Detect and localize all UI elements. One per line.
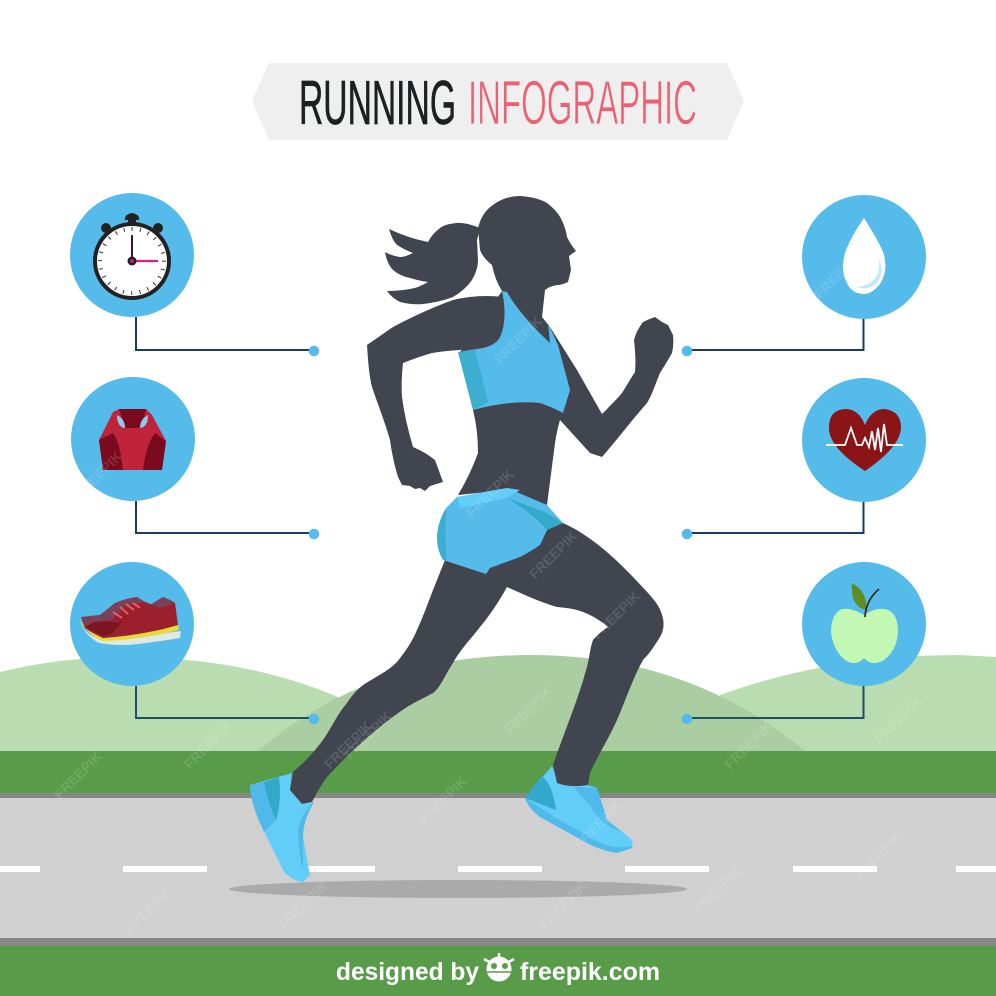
connector: apple xyxy=(688,686,864,718)
watermarks: FREEPIK xyxy=(121,883,175,937)
shoe: front foot xyxy=(525,766,633,853)
title text: running: RUNNING xyxy=(299,69,456,138)
watermarks: FREEPIK xyxy=(851,828,905,882)
watermarks: FREEPIK xyxy=(589,588,643,642)
ponytail xyxy=(385,223,480,304)
background: grass band xyxy=(0,751,996,793)
background: hills xyxy=(0,655,996,751)
watermarks: FREEPIK xyxy=(691,863,745,917)
runner silhouette xyxy=(250,196,673,882)
credit text: freepik.com: freepik.com xyxy=(520,958,660,986)
watermarks: FREEPIK xyxy=(491,313,545,367)
icon: freepik logo xyxy=(484,953,514,982)
circles xyxy=(70,193,926,686)
icon: heart with pulse xyxy=(826,409,903,471)
watermarks: FREEPIK xyxy=(416,773,470,827)
watermarks: FREEPIK xyxy=(71,448,125,502)
watermarks xyxy=(51,248,925,937)
bottom grass strip xyxy=(0,946,996,996)
footer credit xyxy=(336,953,660,986)
watermarks: FREEPIK xyxy=(341,708,395,762)
watermarks: FREEPIK xyxy=(463,466,517,520)
shorts xyxy=(437,488,563,574)
credit text: designed by: designed by xyxy=(336,958,479,986)
watermarks: FREEPIK xyxy=(871,693,925,747)
connector: water xyxy=(688,318,864,350)
connector: stopwatch xyxy=(136,317,314,350)
icon: sports top xyxy=(99,409,166,470)
title banner xyxy=(252,63,744,140)
icon: water drop xyxy=(843,218,885,294)
sports top xyxy=(458,291,570,413)
watermarks: FREEPIK xyxy=(721,718,775,772)
watermarks: FREEPIK xyxy=(571,798,625,852)
connector: sports top xyxy=(136,501,314,533)
watermarks: FREEPIK xyxy=(501,683,555,737)
watermarks: FREEPIK xyxy=(811,248,865,302)
connector dots xyxy=(309,346,692,724)
legs xyxy=(290,500,664,804)
watermarks: FREEPIK xyxy=(526,528,580,582)
road xyxy=(0,793,996,946)
rear arm xyxy=(367,296,507,491)
watermarks: FREEPIK xyxy=(321,718,375,772)
torso and head xyxy=(458,196,673,505)
icon: stopwatch xyxy=(95,213,169,298)
icon: apple xyxy=(831,583,898,663)
watermarks: FREEPIK xyxy=(51,748,105,802)
watermarks: FREEPIK xyxy=(181,718,235,772)
watermarks: FREEPIK xyxy=(536,878,590,932)
connector: heart xyxy=(688,502,864,533)
title text: infographic: INFOGRAPHIC xyxy=(468,69,697,138)
watermarks: FREEPIK xyxy=(276,878,330,932)
connector: shoe xyxy=(136,686,314,718)
shoe: rear foot xyxy=(250,773,314,882)
sports top shading xyxy=(458,350,488,410)
icon: running shoe xyxy=(78,597,181,645)
runner shadow xyxy=(229,880,687,898)
